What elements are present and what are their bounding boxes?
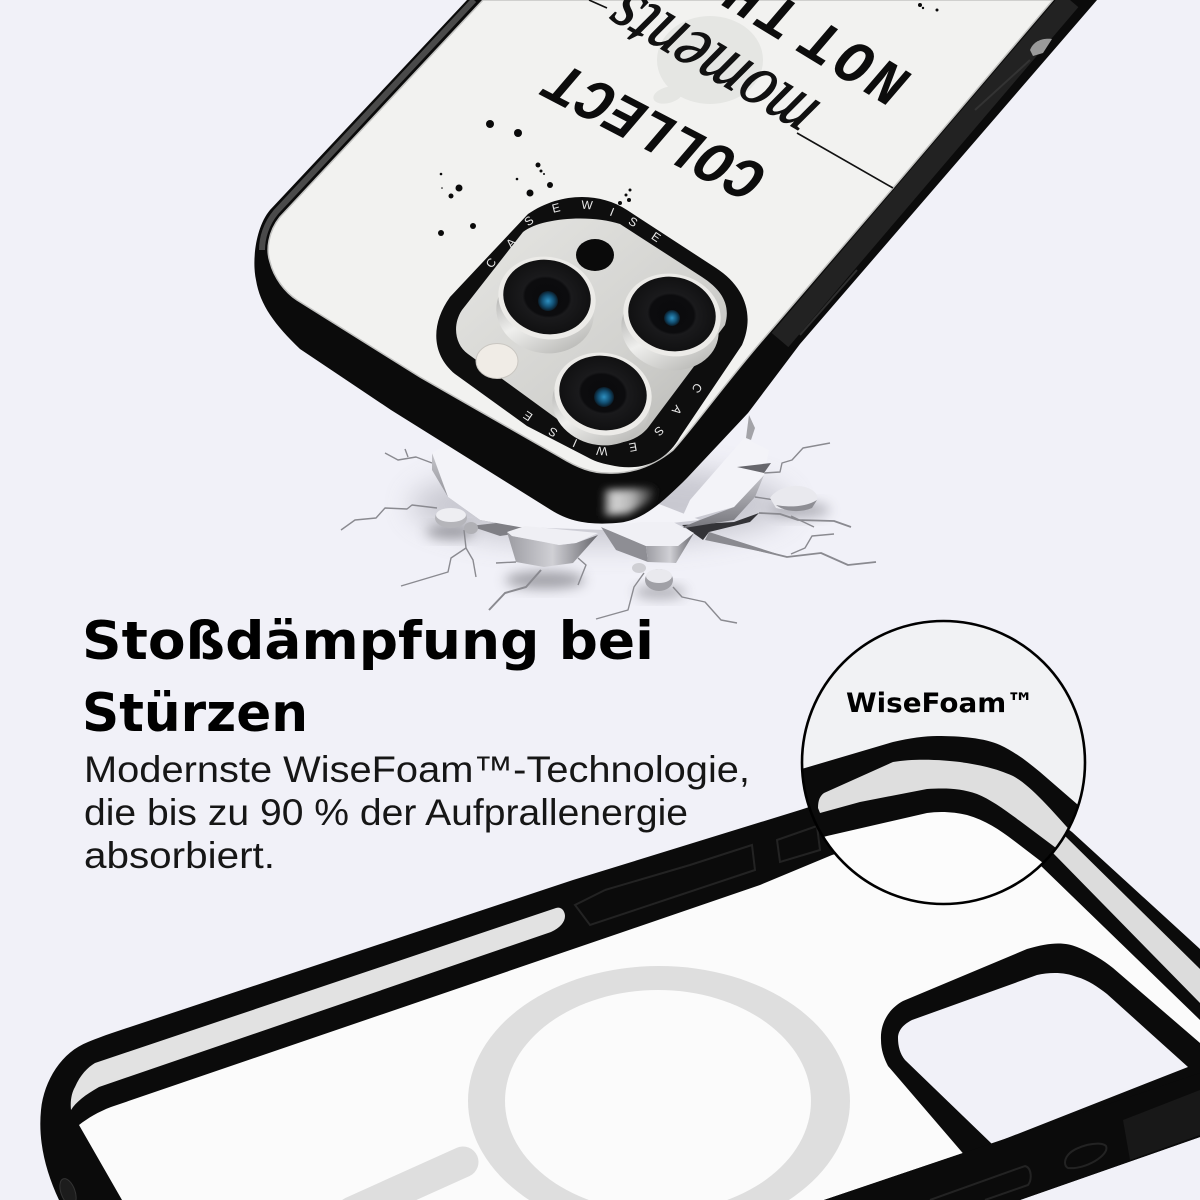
grey foam slot: left	[71, 908, 565, 1110]
camera opening	[898, 973, 1188, 1144]
left edge port	[57, 1176, 79, 1200]
camera island	[436, 197, 748, 467]
brand text on camera ring: A	[669, 403, 685, 417]
camera plateau	[456, 218, 727, 443]
lidar sensor	[576, 239, 614, 271]
inner clear panel	[79, 815, 1200, 1200]
case: black frame	[40, 765, 1200, 1200]
magnified frame inside the circle	[803, 736, 1078, 865]
brand text on camera ring: I	[608, 205, 616, 219]
body text	[84, 749, 750, 876]
bumper highlights	[262, 0, 1070, 516]
camera bumper ring	[436, 197, 748, 467]
brand text on camera ring: S	[522, 213, 536, 229]
magnetic alignment tab	[352, 1162, 463, 1200]
case: black bumper	[254, 0, 1097, 524]
brand text on camera ring: S	[626, 214, 640, 230]
grey foam slot: right	[1053, 836, 1200, 1003]
brand text on camera ring: A	[503, 235, 519, 251]
brand text on camera ring: I	[571, 436, 579, 450]
brand text on camera ring: S	[546, 424, 560, 440]
body text: absorbiert.	[84, 835, 275, 876]
brand text on camera ring: C	[689, 380, 705, 396]
brand text on camera ring: E	[628, 439, 638, 455]
ghost logo showing through	[651, 16, 763, 107]
magnifier circle: WiseFoam	[790, 620, 1100, 910]
heading: Stürzen	[82, 683, 308, 744]
brand text on camera ring: W	[581, 198, 594, 212]
brand text on camera ring: C	[483, 255, 499, 271]
brand text on camera ring: E	[649, 229, 663, 245]
text: COLLECT: COLLECT	[530, 48, 784, 210]
phone with case dropping onto the ground	[254, 0, 1097, 524]
body text: Modernste WiseFoam™-Technologie,	[84, 749, 750, 790]
brand text on camera ring: S	[651, 423, 667, 439]
lens: top left	[489, 248, 603, 362]
text: WiseFoam label: WiseFoam™	[846, 688, 1034, 719]
bottom edge of the frame	[824, 1073, 1200, 1200]
script underline	[589, 0, 893, 188]
bottom edge texture	[1123, 1090, 1200, 1160]
magnetic ring	[468, 966, 850, 1200]
brand text on camera ring: E	[550, 200, 562, 216]
flash	[476, 344, 518, 378]
body text: die bis zu 90 % der Aufprallenergie	[84, 792, 688, 833]
lens: right	[614, 265, 728, 379]
side buttons	[575, 826, 1106, 1200]
brand text on camera ring	[483, 198, 705, 458]
clear case seen from inside	[40, 765, 1200, 1200]
paint splatter dots	[438, 3, 938, 236]
camera cut-out	[881, 943, 1200, 1158]
lens: bottom	[545, 344, 659, 454]
printed back panel	[268, 0, 1053, 473]
heading: Stoßdämpfung bei	[82, 611, 654, 672]
icon: cracked ground	[341, 415, 876, 623]
brand text on camera ring: E	[521, 408, 535, 424]
brand text on camera ring: W	[595, 444, 608, 458]
panel print	[438, 0, 938, 236]
heading	[82, 611, 654, 744]
circle outline	[802, 621, 1085, 904]
